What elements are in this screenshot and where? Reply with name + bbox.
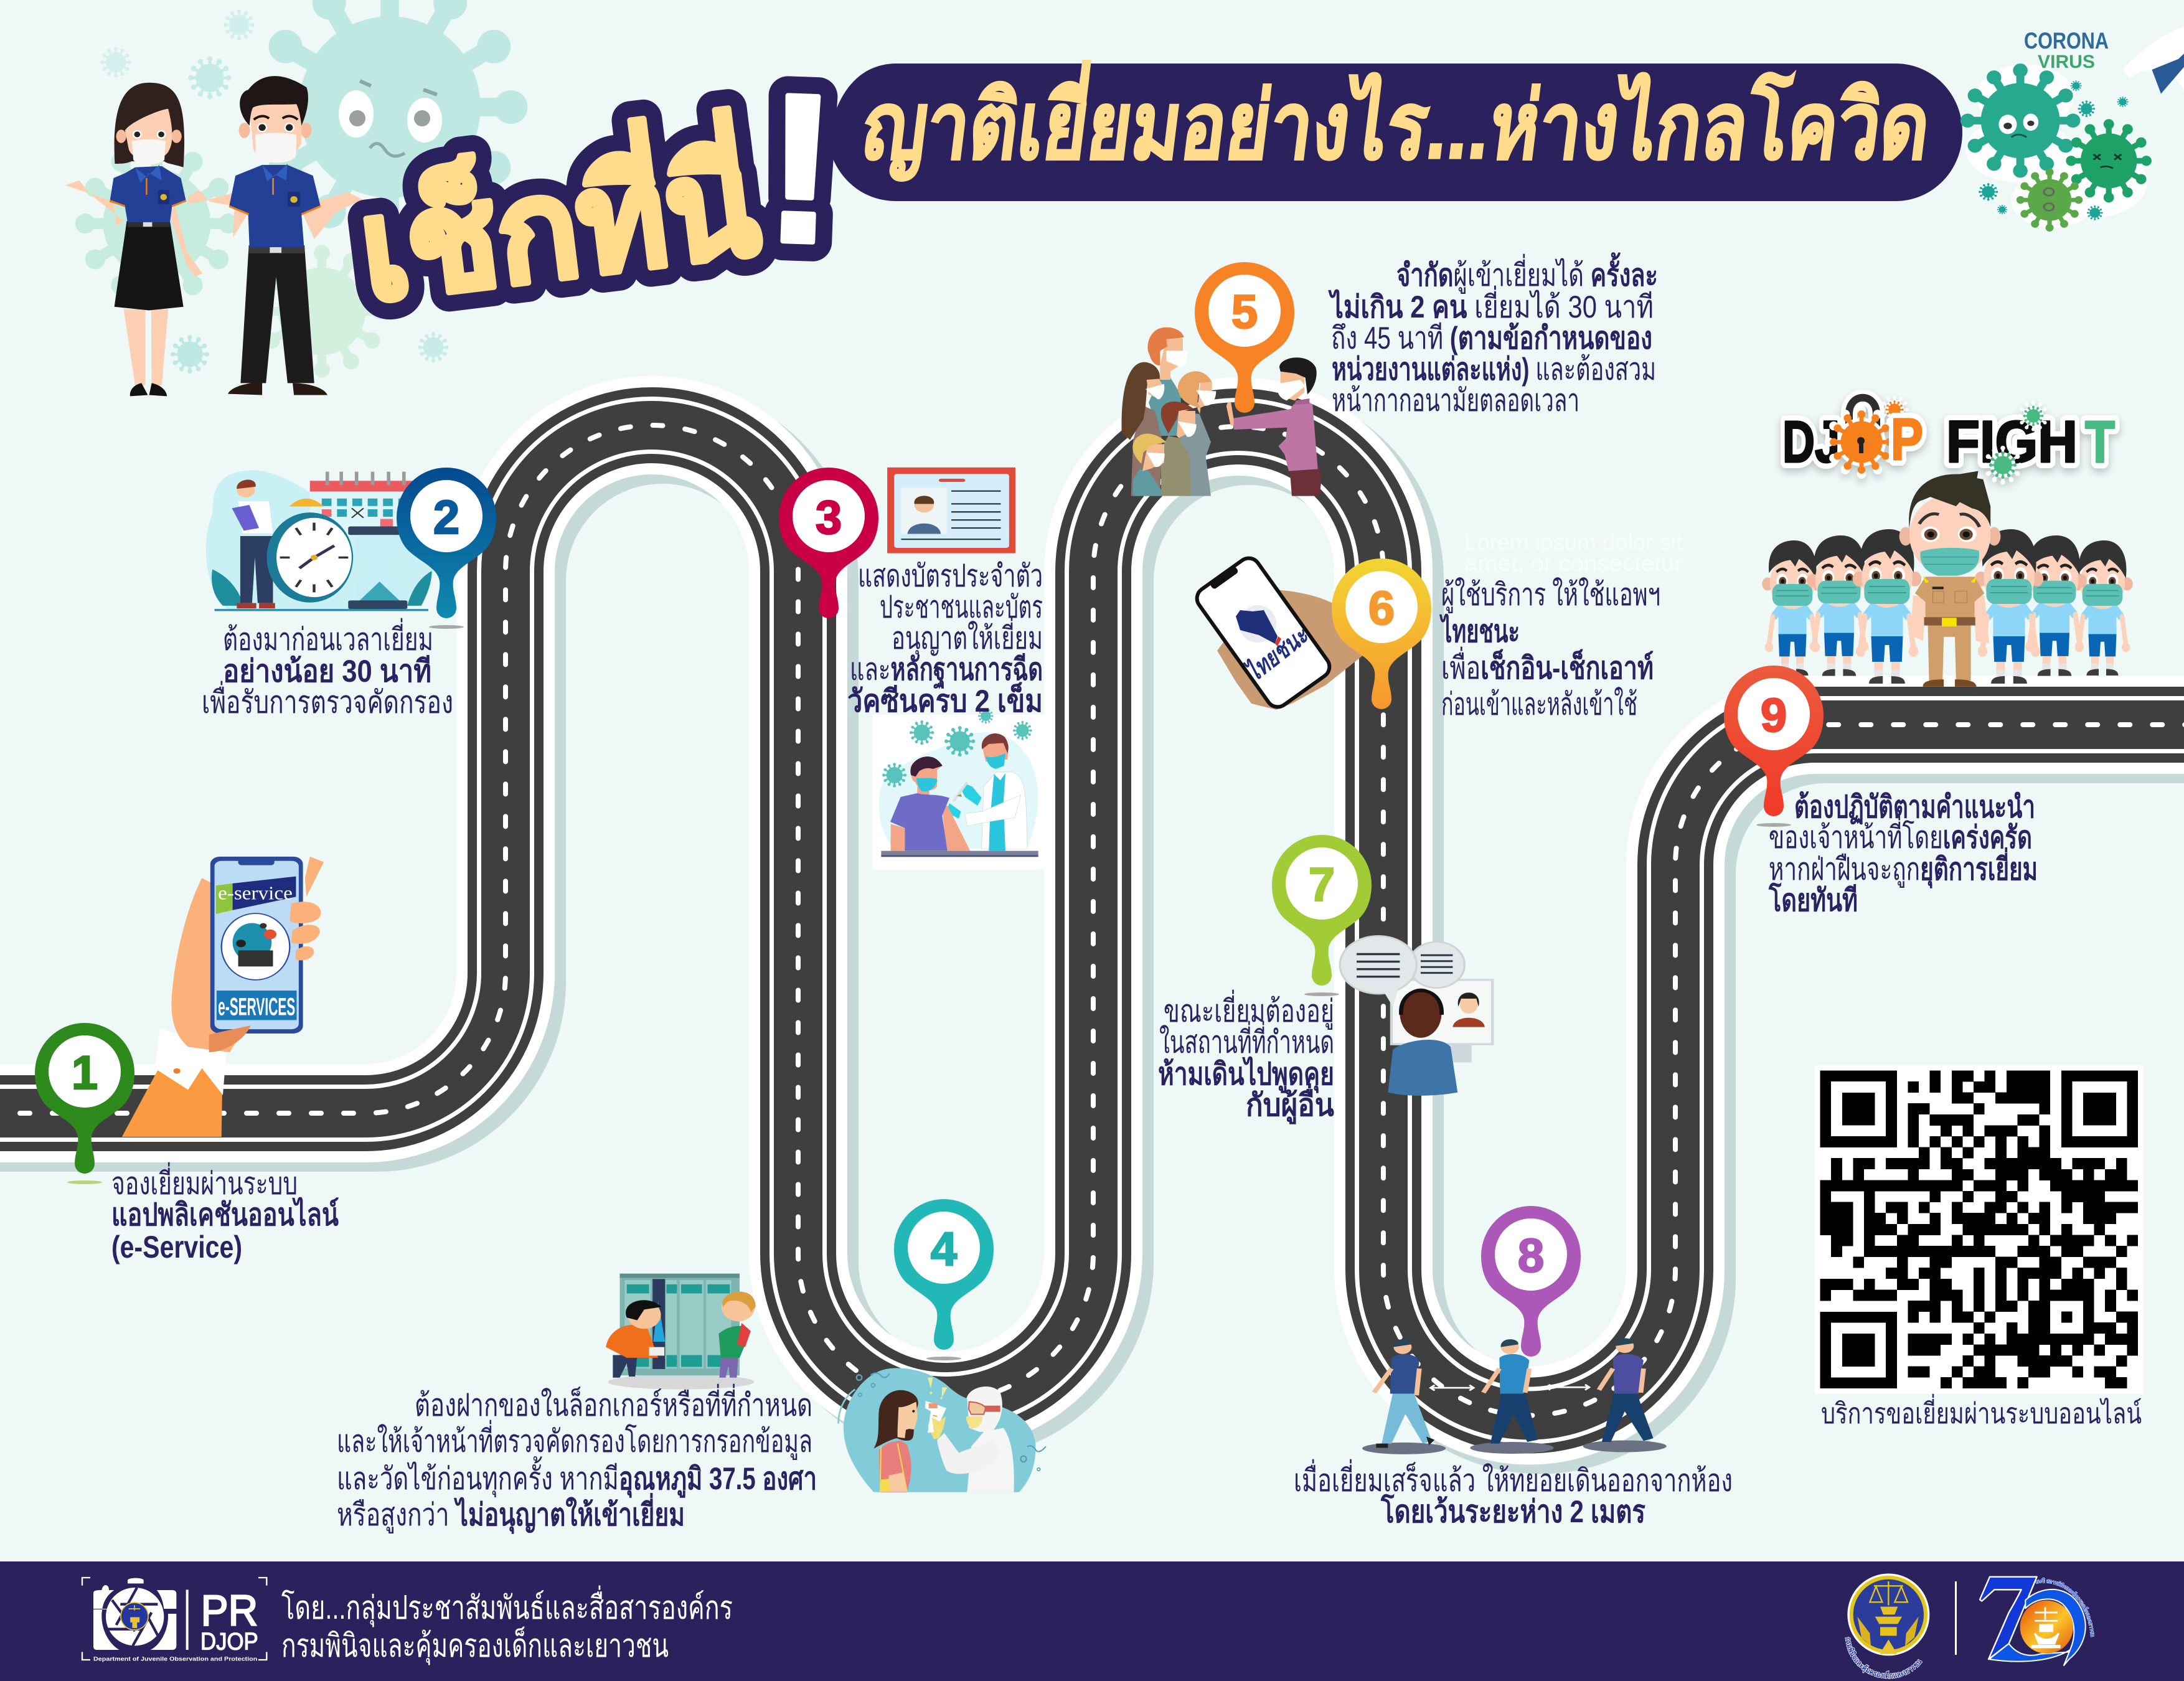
virus 1: [1960, 64, 2080, 178]
text step 1: (e-Service): [111, 1230, 242, 1264]
main title: check here: !: [761, 49, 840, 288]
pin 4: [894, 1199, 994, 1360]
text step 3: วัคซีนครบ 2 เข็ม: [847, 682, 1043, 718]
footer divider: [1955, 1581, 1957, 1655]
lock virus: [1825, 395, 1909, 479]
virus 3: [2017, 168, 2083, 232]
digit zero swirl: [1989, 1589, 2086, 1665]
kid left: [606, 1300, 665, 1378]
text step 7: ขณะเยี่ยมต้องอยู่: [1164, 990, 1334, 1030]
text step 3: ประชาชนและบัตร: [880, 590, 1043, 624]
pin 9: 9: [1761, 689, 1787, 742]
ghost placeholder text: Lorem ipsum dolor sit: [1464, 529, 1682, 555]
T letter: T: [2085, 409, 2115, 475]
footer text line 1: โดย...กลุ่มประชาสัมพันธ์และสื่อสารองค์กร: [281, 1585, 733, 1627]
illustration: two officers: [65, 76, 362, 396]
icon: big pale virus with face: [252, 0, 527, 245]
text step 7: [1158, 990, 1334, 1124]
text step 4: ต้องฝากของในล็อกเกอร์หรือที่ที่กำหนด: [415, 1384, 812, 1423]
illustration step 2: clock and calendar: [206, 470, 433, 611]
phone: [210, 857, 303, 1034]
kid right: [718, 1292, 756, 1378]
text step 2: [202, 618, 453, 720]
e-service banner: e-service: [218, 882, 293, 904]
footer pr djop logo: [82, 1578, 266, 1662]
footer text line 2: กรมพินิจและคุ้มครองเด็กและเยาวชน: [281, 1627, 669, 1665]
illustration step 4: lockers and kids: [606, 1274, 756, 1390]
footer seal logo: กรมพินิจและคุ้มครองเด็กและเยาวชน: [1845, 1636, 1923, 1679]
pin 3: 3: [816, 491, 842, 544]
illustration step 4: temperature check: [839, 1368, 1046, 1492]
virus 2: [2066, 119, 2152, 202]
speech bubbles: [1340, 936, 1464, 1007]
text step 9: [1768, 789, 2038, 918]
person: [232, 479, 275, 608]
fingers: [289, 902, 321, 961]
pin 2: 2: [433, 491, 459, 544]
health worker: [925, 1378, 1014, 1492]
illustration step 3: vaccination scene: [873, 709, 1045, 870]
text step 7: ห้ามเดินไปพูดคุย: [1158, 1056, 1334, 1093]
text step 6: [1439, 577, 1660, 722]
sleeve: [122, 1050, 223, 1137]
FIGH letters: FIGH: [1946, 409, 2078, 475]
text step 8: โดยเว้นระยะห่าง 2 เมตร: [1380, 1493, 1645, 1529]
thai chana label: ไทยชนะ: [1240, 620, 1314, 687]
qr code: [1815, 1065, 2144, 1394]
text step 9: ต้องปฏิบัติตามคำแนะนำ: [1794, 789, 2035, 824]
corona label: CORONA: [2024, 28, 2109, 54]
hand: [171, 878, 247, 1052]
doctor: [946, 733, 1027, 851]
pin 5: 5: [1231, 286, 1258, 339]
footer 70 years logo: ๗๐ปี สถานพินิจและคุ้มครองเด็กและเยาวชน: [2036, 1578, 2094, 1637]
illustration step 7: conversation: [1340, 936, 1492, 1096]
green viruses: [1984, 400, 2049, 484]
text step 9: ของเจ้าหน้าที่โดยเคร่งครัด: [1769, 816, 2032, 855]
text step 1: [111, 1162, 339, 1264]
officer stopping people: [1226, 357, 1322, 496]
FIGH letters: FIGH: [1946, 409, 2078, 475]
text step 3: อนุญาตให้เยี่ยม: [892, 617, 1043, 657]
officer: [1899, 471, 2000, 687]
illustration step 5: group stopped by officer: [1121, 327, 1322, 496]
text step 3: และหลักฐานการฉีด: [850, 652, 1043, 689]
brown hair man: [1161, 402, 1197, 496]
pin 7: [1272, 835, 1372, 996]
pin 1: [35, 1023, 134, 1184]
clock: [266, 499, 353, 603]
calendar: [310, 472, 418, 536]
pin 7: 7: [1309, 859, 1335, 911]
subtitle text: ญาติเยี่ยมอย่างไร...ห่างไกลโควิด: [857, 60, 1937, 182]
pin 8: 8: [1518, 1230, 1544, 1283]
text step 1: แอปพลิเคชันออนไลน์: [111, 1197, 339, 1232]
illustration step 8: walkers: [1362, 1338, 1667, 1454]
pin 4: 4: [931, 1223, 957, 1276]
main title: check here: เช็กที่นี่: [349, 106, 766, 330]
main title: check here: เช็กที่นี่: [349, 106, 766, 330]
text step 4: [337, 1384, 817, 1534]
walker one: [1362, 1339, 1446, 1454]
text step 7: กับผู้อื่น: [1246, 1083, 1334, 1124]
footer 70 years logo: [1979, 1576, 2094, 1666]
pin 3: [779, 468, 878, 618]
kids and officer group: [1762, 471, 2133, 687]
P letter: P: [1891, 407, 1923, 473]
text step 5: [1328, 252, 1658, 418]
headset person: [1388, 989, 1457, 1096]
male officer: [187, 76, 362, 395]
pin 6: 6: [1368, 582, 1395, 635]
T letter: T: [2085, 409, 2115, 475]
DJ letters: DJ: [1782, 409, 1840, 475]
text step 1: จองเยี่ยมผ่านระบบ: [111, 1162, 298, 1201]
text step 2: อย่างน้อย 30 นาที: [223, 654, 431, 689]
corona virus badge: [1960, 27, 2184, 232]
text step 7: ในสถานที่ที่กำหนด: [1159, 1021, 1334, 1060]
text step 4: หรือสูงกว่า ไม่อนุญาตให้เข้าเยี่ยม: [337, 1493, 685, 1534]
text step 5: หน้ากากอนามัยตลอดเวลา: [1332, 383, 1579, 418]
ghost placeholder text: amet, or consectetur: [1464, 550, 1682, 576]
text step 5: ไม่เกิน 2 คน เยี่ยมได้ 30 นาที: [1328, 286, 1654, 324]
pin 1: 1: [72, 1047, 98, 1099]
text step 9: หากฝ่าฝืนจะถูกยุติการเยี่ยม: [1769, 847, 2038, 888]
main title: check here: !: [761, 49, 840, 288]
title pill: [828, 60, 1962, 201]
DJ letters: DJ: [1782, 409, 1840, 475]
text step 2: ต้องมาก่อนเวลาเยี่ยม: [223, 618, 433, 657]
text step 4: และให้เจ้าหน้าที่ตรวจคัดกรองโดยการกรอกข้อมูล: [337, 1420, 812, 1460]
illustration step 1: phone with e-service: e-SERVICES: [218, 992, 295, 1020]
text step 6: ผู้ใช้บริการ ให้ใช้แอพฯ: [1441, 577, 1660, 613]
text step 6: เพื่อเช็กอิน-เช็กเอาท์: [1441, 647, 1654, 685]
patient: [890, 756, 970, 851]
P letter: P: [1891, 407, 1923, 473]
monitor: [1391, 980, 1492, 1062]
pin 9: [1724, 666, 1824, 827]
text step 8: [1294, 1459, 1733, 1529]
woman: [873, 1390, 918, 1492]
tall man: [1147, 327, 1187, 436]
pin 2: [397, 468, 496, 629]
text step 6: ไทยชนะ: [1439, 613, 1520, 649]
road: [0, 425, 2184, 1424]
djop fight logo: [1782, 395, 2115, 484]
footer seal logo: [1845, 1573, 1930, 1679]
background viruses: [75, 0, 527, 378]
pin 6: [1332, 558, 1431, 709]
illustration step 6: thai chana phone: [1193, 554, 1373, 711]
department label: Department of Juvenile Observation and Protection: [93, 1655, 258, 1662]
main title: check here: [349, 49, 840, 330]
djop label: DJOP: [200, 1627, 258, 1655]
hourglass: [348, 527, 411, 609]
text step 5: จำกัดผู้เข้าเยี่ยมได้ ครั้งละ: [1396, 252, 1658, 294]
text step 8: เมื่อเยี่ยมเสร็จแล้ว ให้ทยอยเดินออกจากห้อง: [1294, 1459, 1733, 1498]
pin 8: [1481, 1206, 1581, 1357]
text step 6: ก่อนเข้าและหลังเข้าใช้: [1441, 687, 1637, 722]
boy: [1132, 433, 1166, 496]
footer bar: [0, 1561, 2184, 1681]
text step 3: [847, 558, 1043, 718]
kids: [1762, 529, 2133, 684]
female officer: [65, 83, 202, 396]
long hair woman: [1121, 362, 1164, 496]
virus label: VIRUS: [2038, 52, 2095, 72]
illustration step 3: id card: [887, 468, 1015, 553]
text step 5: ถึง 45 นาที (ตามข้อกำหนดของ: [1331, 321, 1652, 356]
pr label: PR: [201, 1586, 258, 1635]
arrow left: [1431, 1385, 1474, 1390]
text step 5: หน่วยงานแต่ละแห่ง) และต้องสวม: [1332, 352, 1656, 387]
blonde woman: [1178, 371, 1216, 496]
text step 2: เพื่อรับการตรวจคัดกรอง: [202, 681, 453, 720]
plane: [2123, 27, 2184, 91]
text step 9: โดยทันที: [1768, 882, 1858, 918]
text step 4: และวัดไข้ก่อนทุกครั้ง หากมีอุณหภูมิ 37.5 องศา: [337, 1456, 817, 1498]
pin 5: [1195, 262, 1294, 413]
illustration step 1: phone with e-service: [122, 857, 324, 1137]
walker two: [1470, 1339, 1554, 1454]
digit seven: [1980, 1577, 2037, 1659]
fist icon: [1236, 605, 1281, 646]
walker three: [1583, 1338, 1667, 1452]
arrow right: [1546, 1385, 1589, 1390]
text step 3: แสดงบัตรประจำตัว: [858, 558, 1043, 593]
